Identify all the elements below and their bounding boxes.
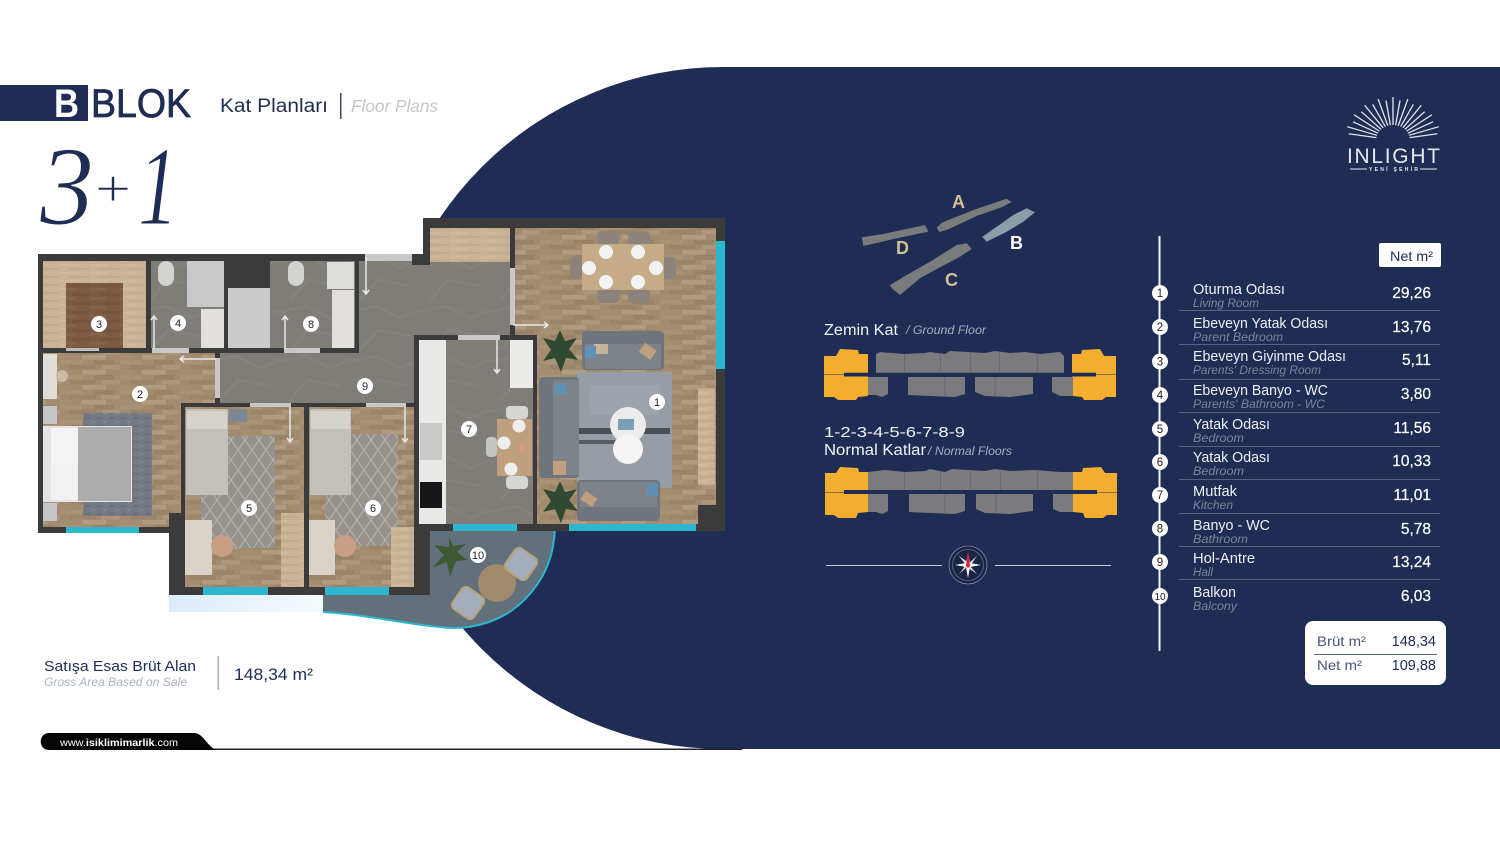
row 10: Balkon [1193,585,1236,601]
plants [543,330,578,372]
navy curved background panel [382,67,1500,749]
room number markers on plan: 5 [246,503,252,515]
room number markers on plan: 6 [370,503,376,515]
block C: C [945,270,958,290]
row 6: 6 [1157,457,1163,469]
row 1: 29,26 [1392,285,1431,302]
row 1 [1152,282,1431,310]
room number markers on plan: 8 [308,319,314,331]
white patch left of the plan's entry wall [405,222,423,254]
hall [220,261,510,403]
room number markers on plan: 4 [175,318,181,330]
row 2 [1152,310,1440,344]
block D: D [896,238,909,258]
room 7 kitchen [419,340,533,531]
block C [890,243,972,295]
dining table [570,231,676,303]
row 3: Parents' Dressing Room [1193,365,1321,377]
block D [862,225,928,258]
net m2 column header: Net m² [1390,248,1433,264]
row 4: Ebeveyn Banyo - WC [1193,383,1328,399]
row 6: Bedroom [1193,466,1244,478]
gross area value [218,656,313,690]
room number markers on plan: 7 [466,424,472,436]
row 8: Bathroom [1193,534,1248,546]
row 6: Yatak Odası [1193,450,1270,466]
totals box [1305,621,1446,685]
row 9: Hall [1193,567,1213,579]
normal floors heading: / Normal Floors [927,446,1012,458]
header: B BLOK block title: B [54,82,79,126]
row 2: Ebeveyn Yatak Odası [1193,316,1328,332]
logo: Inlight: INLIGHT [1347,145,1440,168]
row 3: Ebeveyn Giyinme Odası [1193,349,1346,365]
row 9: 9 [1157,557,1163,569]
logo: Inlight [1347,97,1440,173]
totals box: Net m² [1317,657,1362,673]
row 9: Hol-Antre [1193,551,1255,567]
row 5 [1152,412,1440,445]
row 1: 1 [1157,288,1163,300]
header: floor plans title: Kat Planları [220,96,328,117]
row 5: 11,56 [1393,420,1431,437]
row 9: 13,24 [1392,554,1431,571]
doors [66,254,548,442]
room 1 living room [515,228,725,531]
row 6: 10,33 [1392,453,1431,470]
row 7: Mutfak [1193,484,1238,500]
unit type 3+1: 1 [138,125,178,249]
row 8: Banyo - WC [1193,518,1270,534]
unit type 3+1 [39,125,178,249]
row 1: Oturma Odası [1193,282,1285,298]
header: floor plans title: Floor Plans [351,96,438,116]
gross area label: Satışa Esas Brüt Alan [44,658,196,675]
block B [982,208,1035,253]
row 10: Balcony [1193,601,1238,613]
totals box: 109,88 [1392,658,1436,674]
row 7: 7 [1157,490,1163,502]
row 4 [1152,380,1440,411]
row 7: 11,01 [1393,487,1431,504]
row 4: Parents' Bathroom - WC [1193,399,1326,411]
totals box: Brüt m² [1317,633,1366,649]
row 2: 13,76 [1392,319,1431,336]
normal floors block diagram [825,467,1117,518]
room number markers on plan: 1 [654,397,660,409]
row 2: 2 [1157,322,1163,334]
gross area value: 148,34 m² [234,665,313,684]
ground floor block diagram [824,349,1116,400]
website footer tab [41,733,742,750]
normal floors heading: 1-2-3-4-5-6-7-8-9 [824,424,965,441]
room 8 bathroom [270,261,355,348]
block B: B [1010,233,1023,253]
timeline line for room table [1158,236,1160,651]
website footer tab: www.isiklimimarlik .com [59,738,178,749]
row 9 [1152,546,1440,579]
row 7: Kitchen [1193,500,1233,512]
ground floor heading: / Ground Floor [905,325,987,337]
room number markers on plan: 9 [362,381,368,393]
row 4: 4 [1157,390,1164,402]
row 3 [1152,344,1440,377]
interior walls [43,228,716,595]
room 5 bedroom [185,407,304,595]
key map of blocks [862,192,1035,295]
row 8 [1152,514,1440,546]
row 3: 5,11 [1402,352,1431,369]
header: B BLOK block title: BLOK [91,82,191,126]
shower shaft [228,261,270,348]
balcony [323,528,555,628]
row 10 [1152,580,1440,613]
gross area label [44,658,196,689]
room table [1152,282,1440,613]
room number markers on plan [91,315,665,563]
gross area label: Gross Area Based on Sale [44,677,187,689]
header: B BLOK block title [0,82,191,126]
row 3: 3 [1157,356,1163,368]
unit type 3+1: 3 [39,125,94,249]
block A [937,192,1012,232]
row 5: 5 [1157,424,1163,436]
net m2 column header [1379,243,1441,267]
rug and coffee tables [577,372,672,488]
sofas [539,331,664,521]
totals box: 148,34 [1392,634,1436,650]
floor plan [38,218,725,628]
room 2 parent bedroom [43,353,215,533]
unit type 3+1: + [95,161,131,218]
row 6 [1152,446,1440,478]
row 5: Yatak Odası [1193,417,1270,433]
row 7 [1152,480,1440,512]
outer walls and dark base [38,218,725,595]
normal floors heading [824,424,1012,459]
block A: A [952,192,965,212]
row 8: 5,78 [1401,521,1431,538]
logo: Inlight: YENİ ŞEHİR [1369,166,1418,173]
row 4: 3,80 [1401,386,1431,403]
header: floor plans title [220,93,438,119]
ground floor heading: Zemin Kat [824,322,899,339]
room 4 bathroom [151,261,224,348]
row 10: 10 [1154,592,1166,603]
balcony glass strip [169,595,325,612]
row 10: 6,03 [1401,588,1431,605]
icon: sunburst [1347,97,1439,138]
north compass with lines [826,546,1111,584]
room 6 bedroom [309,407,414,595]
room 3 dressing [43,261,146,348]
normal floors heading: Normal Katlar [824,442,926,459]
room number markers on plan: 2 [137,389,143,401]
row 1: Living Room [1193,298,1259,310]
room number markers on plan: 3 [96,319,102,331]
row 2: Parent Bedroom [1193,332,1283,344]
ground floor heading [824,322,987,339]
row 5: Bedroom [1193,433,1244,445]
room number markers on plan: 10 [472,550,484,562]
entry floor [430,228,510,262]
row 8: 8 [1157,524,1163,536]
